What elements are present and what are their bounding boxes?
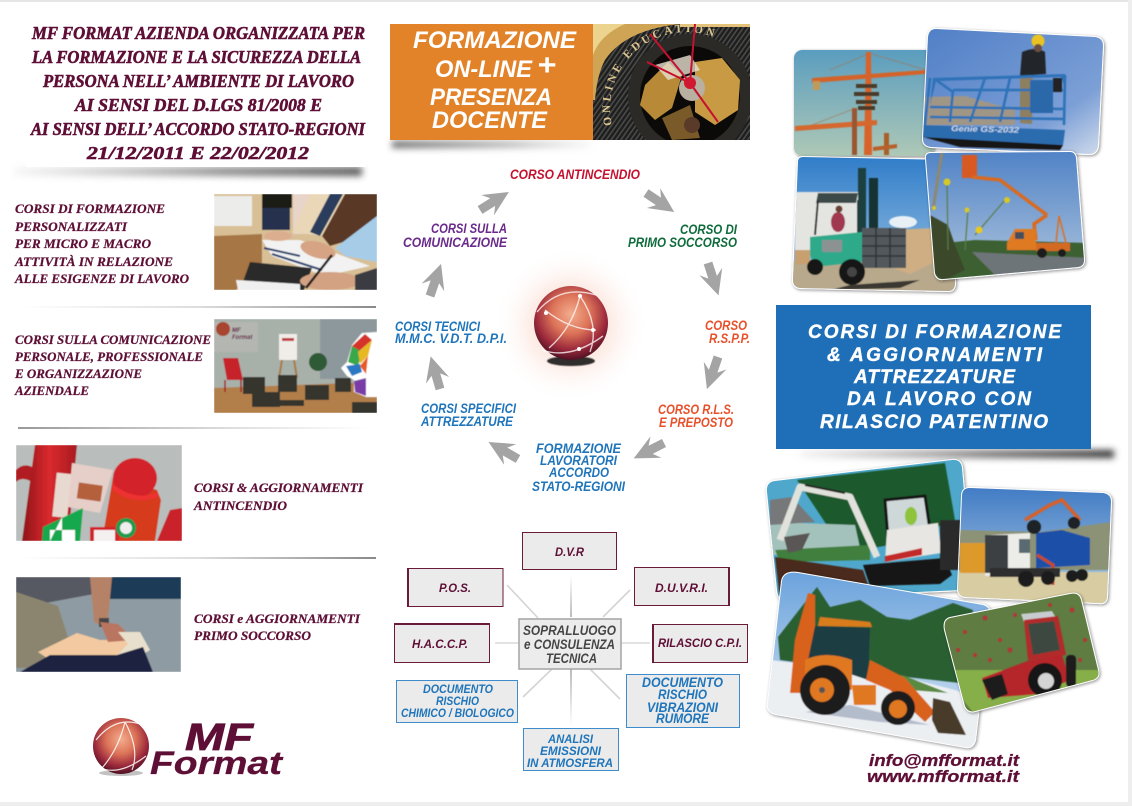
banner text: FORMAZIONE xyxy=(413,27,577,54)
photo: fire safety equipment xyxy=(16,445,182,541)
title block: PERSONA NELL’ AMBIENTE DI LAVORO xyxy=(42,71,354,91)
label: rls: E PREPOSTO xyxy=(659,415,733,430)
text: primo soccorso: PRIMO SOCCORSO xyxy=(194,628,312,643)
banner text: + xyxy=(537,49,556,82)
text: corsi comunicazione: CORSI SULLA COMUNICAZIONE xyxy=(15,332,211,347)
arrow: to antincendio xyxy=(474,182,515,220)
photo: online education clock: ONLINE EDUCATION xyxy=(602,24,716,126)
photo: training room xyxy=(214,319,377,413)
diagram: sopralluogo xyxy=(394,532,748,770)
photo: crane xyxy=(794,50,934,156)
label: primo soccorso: PRIMO SOCCORSO xyxy=(628,235,737,250)
title block: LA FORMAZIONE E LA SICUREZZA DELLA xyxy=(31,47,361,67)
text: corsi comunicazione: PERSONALE, PROFESSIONALE xyxy=(15,349,203,364)
label: comunicazione xyxy=(403,221,508,250)
photo: online education clock xyxy=(593,24,750,140)
divider xyxy=(20,306,376,308)
box: rischio vibrazioni: RISCHIO xyxy=(658,687,707,702)
photo: training room: Format xyxy=(232,335,253,341)
title block: AI SENSI DELL’ ACCORDO STATO-REGIONI xyxy=(30,119,366,139)
label: rls: CORSO R.L.S. xyxy=(658,402,734,417)
box: rischio chimico: CHIMICO / BIOLOGICO xyxy=(401,706,515,720)
contacts: info@mfformat.it xyxy=(869,751,1020,770)
photo: training room: MF xyxy=(232,328,241,334)
central globe xyxy=(493,247,649,403)
label: corsi tecnici: CORSI TECNICI xyxy=(395,319,480,334)
label: corsi tecnici xyxy=(395,319,507,346)
label: attrezzature: ATTREZZATURE xyxy=(420,414,514,429)
box: rischio vibrazioni: RUMORE xyxy=(656,711,710,726)
text: corsi personalizzati: ATTIVITÀ IN RELAZIONE xyxy=(14,254,173,269)
text: antincendio xyxy=(193,480,364,513)
text: corsi comunicazione: AZIENDALE xyxy=(14,383,89,398)
text: corsi personalizzati: ALLE ESIGENZE DI LAVORO xyxy=(14,271,190,286)
label: primo soccorso xyxy=(628,222,737,250)
photo: scissor lift xyxy=(920,25,1110,160)
text: primo soccorso xyxy=(194,611,361,643)
text: antincendio: CORSI & AGGIORNAMENTI xyxy=(194,480,364,495)
arrow: to rls xyxy=(696,353,729,393)
label: attrezzature: CORSI SPECIFICI xyxy=(421,401,516,416)
box: pos: P.O.S. xyxy=(439,581,471,595)
banner text: ON-LINE xyxy=(435,56,533,83)
title block: AI SENSI DEL D.LGS 81/2008 E xyxy=(74,95,322,115)
box: rischio vibrazioni: VIBRAZIONI xyxy=(647,700,718,715)
box: analisi emissioni: ANALISI xyxy=(547,732,594,746)
box: rischio vibrazioni: DOCUMENTO xyxy=(642,675,723,690)
panel: corsi di formazione attrezzature: CORSI DI FORMAZIONE xyxy=(808,322,1062,343)
divider xyxy=(20,557,376,559)
box: duvri xyxy=(634,567,730,606)
orange box xyxy=(390,24,593,140)
photo: backhoe loader xyxy=(765,570,995,750)
panel: corsi di formazione attrezzature xyxy=(776,305,1114,458)
photo: aerial platform xyxy=(920,150,1090,285)
cycle: course types xyxy=(395,167,750,494)
box: dvr: D.V.R xyxy=(555,545,584,559)
label: comunicazione: COMUNICAZIONE xyxy=(403,235,508,250)
label: rls xyxy=(658,402,734,430)
contacts xyxy=(867,751,1021,786)
text: corsi personalizzati: PER MICRO E MACRO xyxy=(15,236,152,251)
label: comunicazione: CORSI SULLA xyxy=(431,221,507,236)
label: corsi tecnici: M.M.C. V.D.T. D.P.I. xyxy=(395,331,507,346)
box: dvr xyxy=(522,532,616,570)
banner text: PRESENZA xyxy=(430,84,552,111)
divider xyxy=(18,427,370,429)
text: corsi personalizzati: PERSONALIZZATI xyxy=(15,219,128,234)
contacts: www.mfformat.it xyxy=(867,767,1021,786)
banner text xyxy=(413,27,577,134)
photo: scissor lift: Genie GS-2032 xyxy=(951,124,1020,135)
arrow: to comunicazione xyxy=(419,260,452,300)
photo: meeting with notes xyxy=(214,194,377,290)
label: rspp xyxy=(705,318,750,346)
panel: corsi di formazione attrezzature: RILASCIO PATENTINO xyxy=(820,412,1048,433)
box: sopralluogo: SOPRALLUOGO xyxy=(523,623,616,638)
box: rilascio cpi: RILASCIO C.P.I. xyxy=(658,636,742,650)
box: pos xyxy=(407,568,503,607)
photo: truck with crane xyxy=(955,485,1115,606)
arrow: to corsi tecnici xyxy=(419,353,452,392)
box: analisi emissioni: EMISSIONI xyxy=(540,744,602,758)
panel: corsi di formazione attrezzature: ATTREZZATURE xyxy=(853,367,1016,388)
arrow: to rspp xyxy=(697,259,730,299)
text: corsi personalizzati xyxy=(14,201,190,286)
photo: excavator xyxy=(765,455,975,605)
box: rischio chimico: RISCHIO xyxy=(436,694,480,708)
label: rspp: CORSO xyxy=(705,318,747,333)
box: sopralluogo xyxy=(519,619,621,669)
box: haccp: H.A.C.C.P. xyxy=(412,637,468,651)
label: formazione lavoratori: FORMAZIONE xyxy=(536,441,622,456)
label: attrezzature xyxy=(420,401,516,429)
text: corsi comunicazione: E ORGANIZZAZIONE xyxy=(14,366,142,381)
box: analisi emissioni xyxy=(524,728,618,770)
arrow: to attrezzature xyxy=(483,432,524,469)
arrow: to formazione lavoratori xyxy=(628,432,669,469)
photo: orchard tractor xyxy=(940,590,1105,715)
label: rspp: R.S.P.P. xyxy=(709,331,750,346)
text: antincendio: ANTINCENDIO xyxy=(193,498,288,513)
arrow: to primo soccorso xyxy=(639,183,681,222)
box: rischio chimico: DOCUMENTO xyxy=(423,682,494,696)
text: corsi comunicazione xyxy=(14,332,211,398)
logo: MF Format xyxy=(93,717,284,781)
logo: MF Format: MF xyxy=(185,717,255,759)
logo: MF Format: Format xyxy=(150,745,284,781)
text: primo soccorso: CORSI e AGGIORNAMENTI xyxy=(194,611,361,626)
title block xyxy=(14,10,366,176)
panel: corsi di formazione attrezzature: DA LAVORO CON xyxy=(847,389,1032,410)
label: primo soccorso: CORSO DI xyxy=(680,222,737,237)
logo sphere xyxy=(93,718,149,776)
box: rilascio cpi xyxy=(652,624,748,663)
box: haccp xyxy=(394,623,490,662)
banner: formazione on-line xyxy=(390,24,593,148)
box: sopralluogo: e CONSULENZA xyxy=(524,637,615,652)
label: formazione lavoratori xyxy=(532,441,625,494)
label: corso antincendio: CORSO ANTINCENDIO xyxy=(510,167,640,182)
box: sopralluogo: TECNICA xyxy=(546,651,597,666)
box: rischio chimico xyxy=(396,680,518,722)
label: formazione lavoratori: LAVORATORI xyxy=(540,453,617,468)
photo: forklift xyxy=(790,155,960,295)
label: formazione lavoratori: STATO-REGIONI xyxy=(532,479,625,494)
text: corsi personalizzati: CORSI DI FORMAZIONE xyxy=(15,201,165,216)
banner text: DOCENTE xyxy=(432,107,548,134)
title block: MF FORMAT AZIENDA ORGANIZZATA PER xyxy=(31,23,365,43)
box: duvri: D.U.V.R.I. xyxy=(655,581,708,595)
box: analisi emissioni: IN ATMOSFERA xyxy=(527,756,613,770)
photo: CPR first aid xyxy=(16,577,181,672)
label: formazione lavoratori: ACCORDO xyxy=(548,465,609,480)
title block: 21/12/2011 E 22/02/2012 xyxy=(86,143,309,163)
panel: corsi di formazione attrezzature: & AGGIORNAMENTI xyxy=(827,345,1043,366)
box: rischio vibrazioni xyxy=(626,674,740,728)
